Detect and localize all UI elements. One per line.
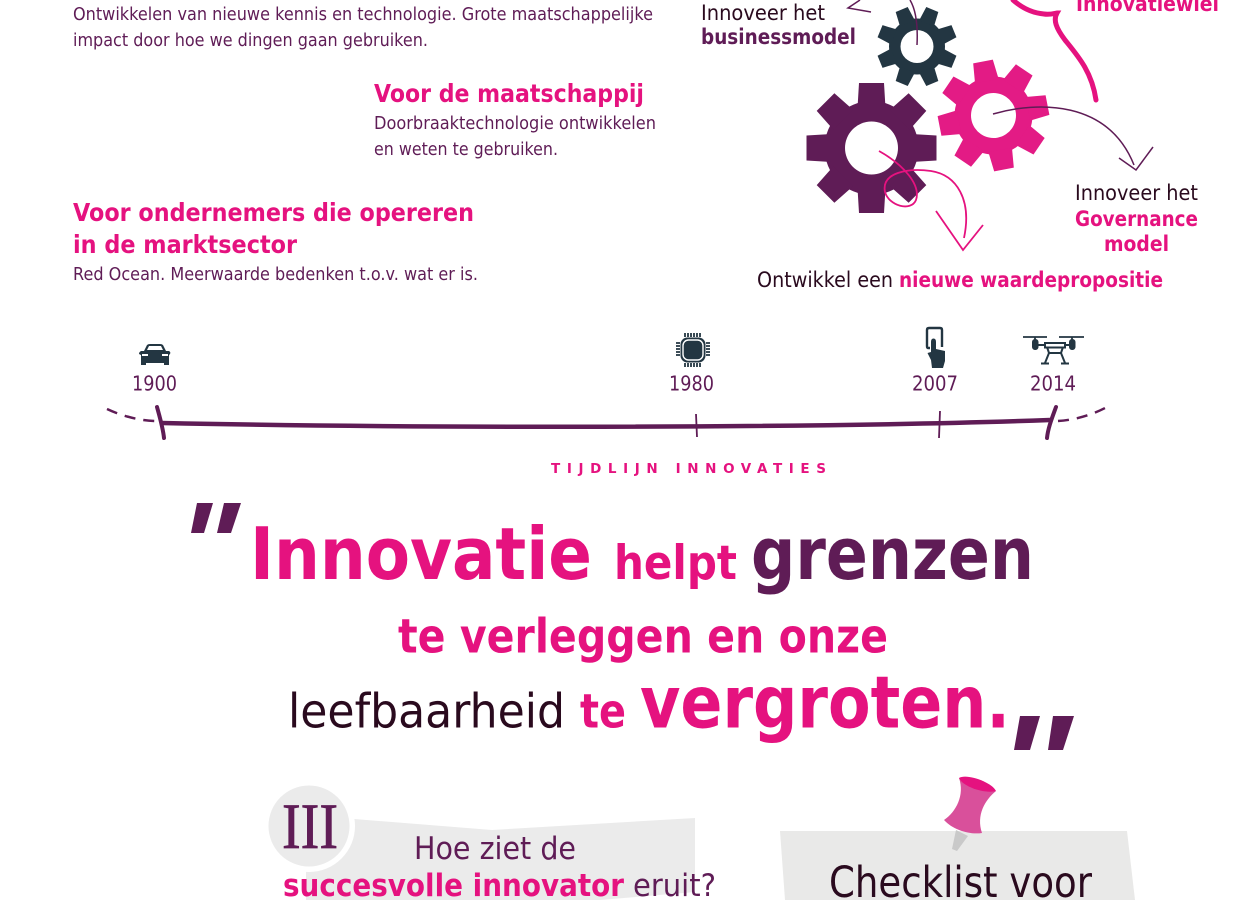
panel: innovation audiences text	[73, 5, 656, 285]
text block: intro: Ontwikkelen van nieuwe kennis en technologie. Grote maatschappelijke	[73, 5, 653, 25]
icon: pink gear	[929, 51, 1058, 180]
numeral badge	[263, 780, 355, 872]
text block: intro	[73, 5, 653, 51]
grey banner	[306, 818, 695, 900]
numeral badge: III	[282, 791, 338, 863]
heading: voor de maatschappij: Voor de maatschappij	[374, 79, 644, 108]
heading: voor ondernemers: Voor ondernemers die opereren	[73, 198, 474, 227]
section heading text: Hoe ziet de	[414, 831, 576, 867]
arrow: businessmodel	[848, 0, 917, 45]
year labels: 1900	[132, 372, 177, 396]
year labels: 2007	[912, 372, 958, 396]
icon: chip	[676, 333, 710, 367]
icon: drone	[1023, 337, 1084, 364]
quote line 1: helpt	[614, 536, 737, 591]
panel: checklist note	[780, 777, 1135, 900]
year labels: 2014	[1030, 372, 1076, 396]
quote line 1: grenzen	[751, 512, 1034, 596]
label: businessmodel	[701, 1, 856, 50]
panel: innovation wheel	[701, 0, 1219, 293]
label: governance model: model	[1104, 232, 1169, 257]
label: nieuwe waardepropositie: nieuwe waardepropositie	[899, 268, 1163, 293]
text block: intro: impact door hoe we dingen gaan gebruiken.	[73, 31, 428, 51]
icon: opening quote mark	[191, 503, 241, 533]
quote line 1	[250, 512, 1034, 596]
text block: maatschappij: en weten te gebruiken.	[374, 140, 558, 160]
timeline axis	[107, 407, 1107, 438]
panel: quote	[191, 503, 1074, 750]
timeline caption: TIJDLIJN INNOVATIES	[551, 461, 826, 477]
heading: voor ondernemers	[73, 198, 474, 259]
quote line 3: leefbaarheid	[288, 684, 565, 740]
icon: closing quote mark	[1014, 716, 1074, 750]
arrow: waardepropositie	[879, 151, 983, 250]
quote line 1: Innovatie	[250, 512, 592, 596]
label: businessmodel: Innoveer het	[701, 1, 825, 26]
note paper	[780, 831, 1135, 900]
icon: car	[139, 344, 170, 365]
label: governance model: Innoveer het	[1075, 181, 1198, 206]
quote line 2: te verleggen en onze	[398, 610, 888, 664]
heading: voor ondernemers: in de marktsector	[73, 230, 298, 259]
label: nieuwe waardepropositie	[757, 268, 1163, 293]
arrow: pink innovatiewiel line	[1013, 0, 1096, 100]
section heading text	[283, 831, 716, 900]
year labels	[132, 372, 1076, 396]
quote line 3: vergroten.	[640, 660, 1010, 744]
text block: maatschappij: Doorbraaktechnologie ontwikkelen	[374, 114, 656, 134]
label: governance model: Governance	[1075, 207, 1198, 232]
quote line 3: te	[580, 684, 626, 740]
label: governance model	[1075, 181, 1198, 257]
panel: timeline	[107, 328, 1107, 477]
label: nieuwe waardepropositie: Ontwikkel een	[757, 268, 893, 293]
icon: purple gear	[806, 83, 936, 213]
icon: phone and hand	[927, 328, 945, 368]
text block: maatschappij	[374, 114, 656, 160]
quote line 3	[288, 660, 1010, 744]
icon: dark gear	[865, 0, 969, 99]
text block: red ocean: Red Ocean. Meerwaarde bedenken t.o.v. wat er is.	[73, 265, 478, 285]
panel: section III heading	[263, 780, 716, 900]
icon: push pin	[944, 777, 996, 851]
year labels: 1980	[669, 372, 714, 396]
arrow: governance	[993, 107, 1153, 170]
label: businessmodel: businessmodel	[701, 25, 856, 50]
